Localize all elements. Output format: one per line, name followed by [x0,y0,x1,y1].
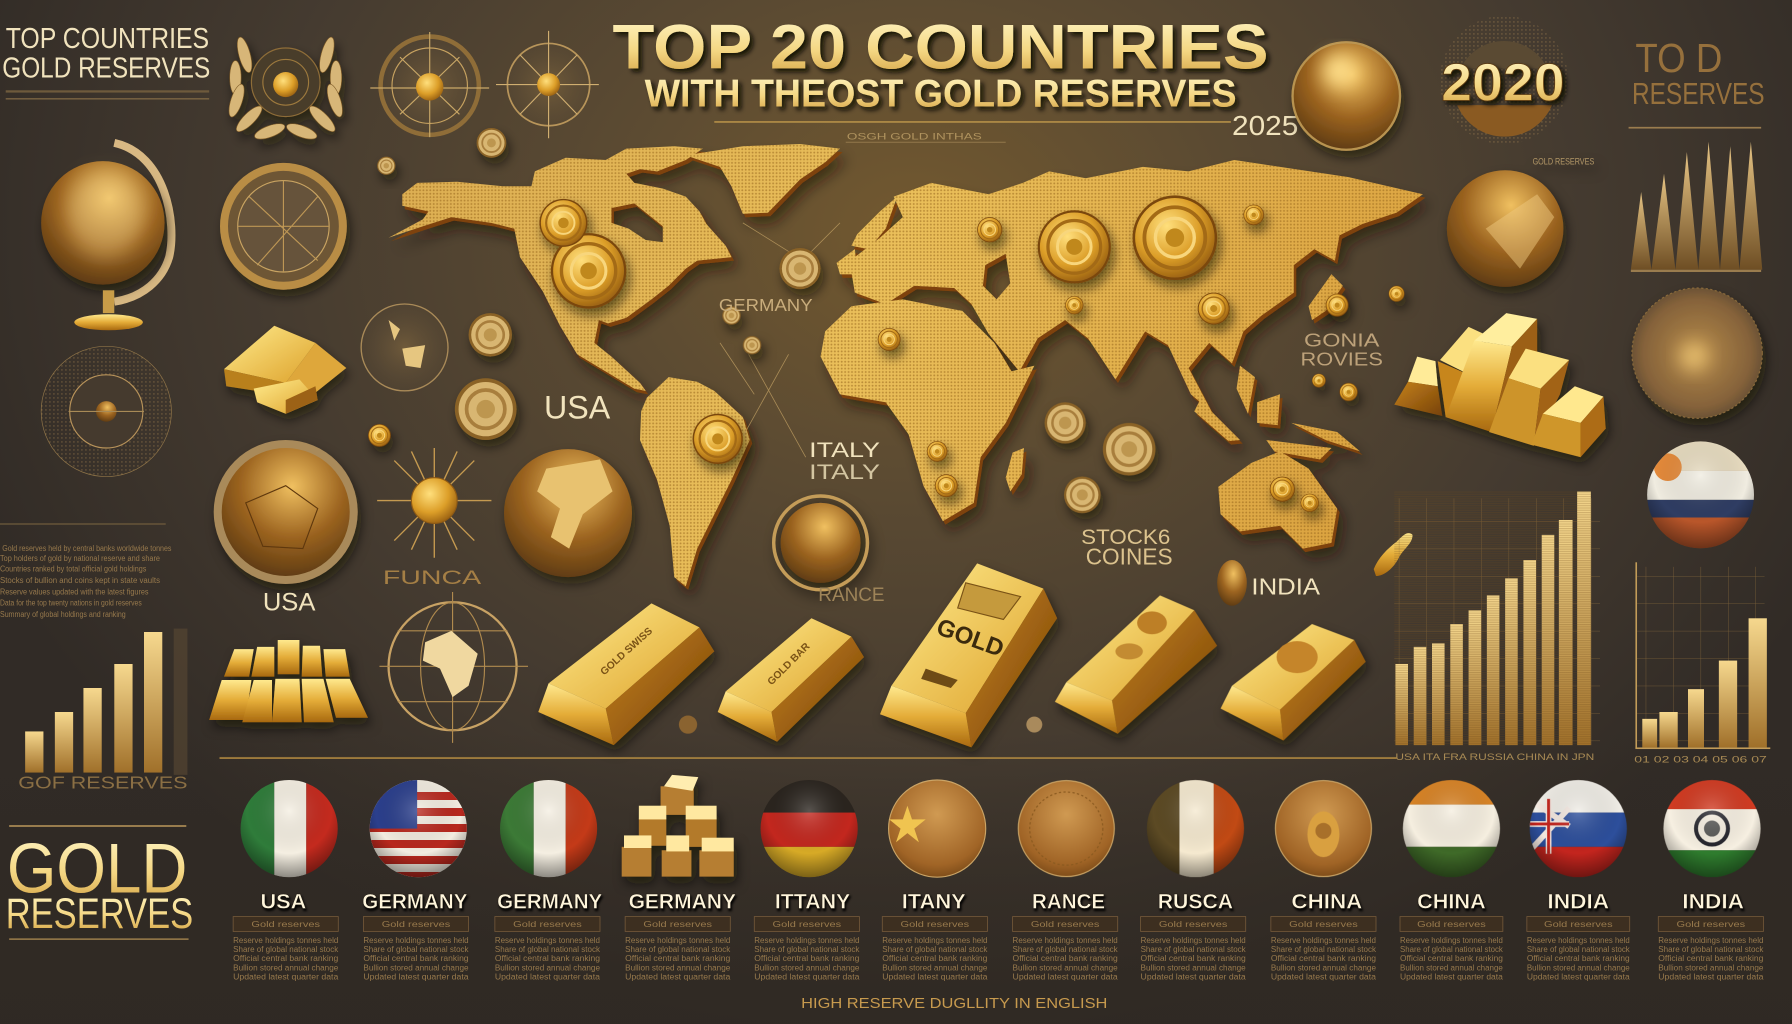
column: USA: Share of global national stock [233,945,339,954]
icon: compass ring [224,167,343,286]
label: Stock & Coins: STOCK6 [1081,524,1170,549]
column: Itany 1: ITTANY [775,889,851,914]
panel: top-left heading: GOLD RESERVES [2,53,210,85]
column: Rusca: Reserve holdings tonnes held [1141,936,1246,945]
label: France: RANCE [818,584,885,606]
icon: 2020 badge: 2020 [1441,54,1565,113]
column: Germany 1 [362,889,470,981]
column: Germany 2: GERMANY [497,889,603,914]
world map [389,144,1423,586]
label: Stock & Coins: COINES [1086,544,1173,570]
column: Rance: RANCE [1032,889,1105,914]
label: Funca: FUNCA [383,567,481,589]
coin: Australia 2 [1301,494,1319,512]
column: Germany 3: Official central bank ranking [625,954,730,963]
column: India 1: Share of global national stock [1527,945,1631,954]
heading: gold reserves: GOLD [7,830,187,909]
subtitle rule and year [714,110,1298,143]
column: Itany 1: Official central bank ranking [754,954,859,963]
flag: bronze medallion 2 [1275,781,1371,877]
coin: Australia [1270,477,1295,502]
coin: Atlantic [779,248,821,289]
column: China 2: Gold reserves [1417,920,1486,929]
icon: desk globe [41,143,171,330]
icon: medium coins left of map [368,313,517,447]
map: islands [837,197,1360,491]
icon: sphere top-right [1293,42,1400,150]
chart: gold bars with grid [1394,491,1600,762]
column: India 1: INDIA [1547,889,1609,914]
footer text: HIGH RESERVE DUGLLITY IN ENGLISH [801,996,1107,1012]
icon: wire globe with Africa [379,592,528,743]
icon: 2020 badge [1440,16,1568,144]
column: India 2: Updated latest quarter data [1658,972,1764,981]
column: Rusca [1141,889,1247,981]
column: Itany 2: Updated latest quarter data [882,972,988,981]
panel: top-right heading: TO D [1635,35,1722,81]
column: China 2 [1400,889,1504,981]
heading: gold reserves [6,825,193,940]
panel: left description text: Top holders of gold by national reserve and share [0,554,160,563]
icon: gold bar pyramid [209,640,368,722]
map: South America [640,377,750,586]
coin: Africa south [927,441,947,462]
map: Australia [1218,451,1337,549]
icon: sunburst coin [377,448,491,558]
column: Itany 2: Gold reserves [901,920,969,929]
column: China 2: Official central bank ranking [1400,954,1503,963]
label: Italy: ITALY [809,459,880,484]
column: India 2 [1658,889,1764,981]
subtitle rule and year: 2025 [1232,110,1298,141]
country columns [233,889,1764,981]
column: Rance: Official central bank ranking [1013,954,1118,963]
title: WITH THEOST GOLD RESERVES [645,72,1237,115]
column: China 2: Share of global national stock [1400,945,1504,954]
panel: top-right heading [1629,35,1765,129]
column: India 2: INDIA [1682,889,1744,914]
icon: tiny coins near bars [679,715,1042,734]
flag: union-tricolour [1529,778,1627,881]
column: Itany 1: Updated latest quarter data [754,972,860,981]
panel: left description text: Reserve values updated with the latest figures [0,587,149,596]
column: China 2: Reserve holdings tonnes held [1400,936,1503,945]
coin: Brazil [693,414,743,464]
column: China 2: CHINA [1417,889,1486,914]
chart: left bars: GOF RESERVES [18,773,187,793]
column: China 2: Updated latest quarter data [1400,972,1503,981]
column: China 1: Bullion stored annual change [1271,963,1377,972]
column: Germany 1: Bullion stored annual change [363,963,469,972]
icon: large gold globe [214,440,358,584]
label: Gonia Rovies: GONIA [1304,329,1380,350]
map: Eurasia [851,160,1423,411]
icon: laurel wreath emblem [226,36,346,142]
icon: glass world circle [361,304,448,391]
column: Germany 3: Updated latest quarter data [625,972,731,981]
column: Rance: Updated latest quarter data [1013,972,1118,981]
chart: small bars with grid: 01 02 03 04 05 06 07 [1634,754,1767,764]
label: Italy: ITALY [809,437,880,462]
label: Germany: GERMANY [719,295,813,315]
column: USA: Official central bank ranking [233,954,338,963]
icon: big gold bar [880,563,1057,747]
title: TOP 20 COUNTRIES [613,13,1269,83]
column: India 1: Official central bank ranking [1527,954,1630,963]
flag: bronze medallion 1 [1018,781,1114,877]
icon: big gold bar: GOLD [933,614,1007,663]
column: Itany 2: Share of global national stock [882,945,988,954]
icon: gold bar 4 [1055,595,1217,734]
icon: glowing coin [774,496,867,590]
column: Germany 2: Reserve holdings tonnes held [495,936,600,945]
icon: crosshair globe 2 [496,31,599,138]
map coins [539,195,1319,512]
column: Itany 1 [754,889,860,981]
column: USA: Gold reserves [251,920,320,929]
column: China 1: Reserve holdings tonnes held [1271,936,1376,945]
column: China 1: Updated latest quarter data [1271,972,1377,981]
coin: Canada [539,199,587,247]
icon: gold cube pyramid [622,775,734,877]
column: Rance [1013,889,1119,981]
column: Germany 1: Share of global national stock [363,945,470,954]
column: Itany 1: Reserve holdings tonnes held [754,936,859,945]
flag: India [1663,778,1761,881]
coin: China [1198,293,1230,325]
label: Stock & Coins [1081,524,1173,570]
icon: gold bar 1: GOLD SWISS [599,626,655,678]
chart: gold bars with grid: USA ITA FRA RUSSIA CHINA IN JPN [1395,752,1594,762]
map connector lines [720,223,840,457]
column: Germany 2: Bullion stored annual change [495,963,601,972]
map: North America [389,146,731,391]
column: India 2: Gold reserves [1677,920,1745,929]
column: Rance: Bullion stored annual change [1013,963,1118,972]
icon: gold bar 1 [538,603,714,745]
label: India with coin: INDIA [1251,573,1321,599]
column: China 1: Gold reserves [1289,920,1358,929]
icon: gold ingot pile left [224,326,346,414]
flag: tricolour [1146,778,1247,879]
column: India 1: Bullion stored annual change [1527,963,1630,972]
panel: left description text: Gold reserves held by central banks worldwide tonnes [2,544,171,553]
icon: gold bar 5 [1221,624,1366,741]
column: USA [233,889,339,981]
title [613,13,1269,115]
panel: left description text [0,523,171,619]
column: Germany 3: Bullion stored annual change [625,963,731,972]
chart: left bars [18,629,187,793]
column: India 1: Gold reserves [1544,920,1613,929]
column: Itany 1: Bullion stored annual change [754,963,860,972]
column: China 1: Official central bank ranking [1271,954,1376,963]
panel: left description text: Data for the top twenty nations in gold reserves [0,599,142,608]
label: Italy [809,437,880,484]
column: India 2: Bullion stored annual change [1658,963,1764,972]
chart: small bars with grid [1634,562,1770,764]
flag: Italy 2 [499,778,600,879]
coin: Europe [977,217,1002,242]
column: Rance: Share of global national stock [1013,945,1119,954]
icon: dotted globe mid-left [41,346,171,477]
column: Germany 1: Updated latest quarter data [363,972,469,981]
divider [219,757,1397,759]
column: Germany 2 [495,889,603,981]
column: Germany 3: GERMANY [629,889,737,914]
panel: top-left heading [2,23,210,99]
icon: small coins top-left [377,128,506,175]
column: USA: Bullion stored annual change [233,963,339,972]
column: Itany 1: Share of global national stock [754,945,860,954]
coin: Africa south 2 [935,474,958,497]
column: Germany 1: Gold reserves [382,920,450,929]
column: Rance: Gold reserves [1031,920,1099,929]
icon: gold globe center [504,449,632,577]
flag: Italy 1 [240,778,341,879]
column: India 1 [1527,889,1631,981]
coin: Africa [878,328,901,351]
column: China 1: Share of global national stock [1271,945,1377,954]
column: India 1: Updated latest quarter data [1527,972,1630,981]
column: Germany 3: Reserve holdings tonnes held [625,936,730,945]
column: Rusca: Gold reserves [1159,920,1227,929]
icon: gold bar 2: GOLD BAR [766,641,813,688]
column: Rusca: Bullion stored annual change [1141,963,1246,972]
icon: crosshair globe 1 [370,32,489,137]
panel: left description text: Countries ranked by total official gold holdings [0,564,146,573]
column: Germany 1: Reserve holdings tonnes held [363,936,469,945]
icon: bronze disc right [1632,288,1762,418]
panel: left description text: Stocks of bullion and coins kept in state vaults [0,576,160,585]
heading: gold reserves: RESERVES [6,890,193,937]
column: Germany 2: Updated latest quarter data [495,972,601,981]
label: India with coin [1217,560,1321,606]
flag: Germany [760,778,858,881]
column: India 2: Official central bank ranking [1658,954,1763,963]
column: China 2: Bullion stored annual change [1400,963,1503,972]
column: Itany 2: Bullion stored annual change [882,963,988,972]
panel: left description text: Summary of global holdings and ranking [0,610,126,619]
coin: Siberia [1243,205,1264,225]
column: Itany 2: Reserve holdings tonnes held [882,936,987,945]
chart: spikes [1631,142,1762,272]
label: USA under globe: USA [263,588,316,616]
column: Germany 2: Share of global national stock [495,945,601,954]
column: USA: Updated latest quarter data [233,972,339,981]
column: India 2: Reserve holdings tonnes held [1658,936,1763,945]
column: Rusca: RUSCA [1158,889,1233,914]
coin: Russia east [1133,195,1217,280]
flag: USA [369,778,467,880]
column: Germany 3: Gold reserves [643,920,712,929]
icon: flag disc right [1647,441,1755,550]
label: Gonia Rovies [1301,329,1383,370]
map: Greenland [686,144,840,214]
column: Rusca: Official central bank ranking [1141,954,1246,963]
map: Africa [821,299,1034,521]
column: Itany 2 [882,889,988,981]
column: China 1: CHINA [1291,889,1363,914]
column: Germany 3: Share of global national stock [625,945,731,954]
coin: India [1065,296,1083,314]
column: Germany 2: Official central bank ranking [495,954,600,963]
label: Gonia Rovies: ROVIES [1301,349,1383,370]
column: Germany 3 [625,889,737,981]
column: Germany 1: Official central bank ranking [363,954,469,963]
icon: gold ingot stack right [1394,313,1606,457]
column: USA: Reserve holdings tonnes held [233,936,338,945]
loose coins in ocean [722,286,1405,513]
column: India 2: Share of global national stock [1658,945,1764,954]
column: Germany 1: GERMANY [362,889,468,914]
flag: saffron white green [1402,778,1501,881]
icon: copper disc: GOLD RESERVES [1533,157,1594,167]
column: Rusca: Updated latest quarter data [1141,972,1246,981]
column: Itany 1: Gold reserves [773,920,841,929]
coin: large USA [551,233,626,309]
column: China 1 [1271,889,1377,981]
label: USA: USA [544,389,611,425]
column: Rusca: Share of global national stock [1141,945,1247,954]
column: India 1: Reserve holdings tonnes held [1527,936,1630,945]
icon: gold bar 2 [718,618,864,742]
subtitle rule and year: OSGH GOLD INTHAS [847,131,982,141]
column: Rance: Reserve holdings tonnes held [1013,936,1118,945]
column: USA: USA [261,889,307,914]
coin: Russia west [1038,210,1111,283]
column: Germany 2: Gold reserves [513,920,582,929]
panel: top-left heading: TOP COUNTRIES [6,23,209,55]
icon: copper disc [1447,157,1594,287]
column: Itany 2: ITANY [902,889,966,914]
column: Itany 2: Official central bank ranking [882,954,987,963]
flag: star medallion [889,780,986,877]
icon: gold nugget [1374,533,1413,576]
